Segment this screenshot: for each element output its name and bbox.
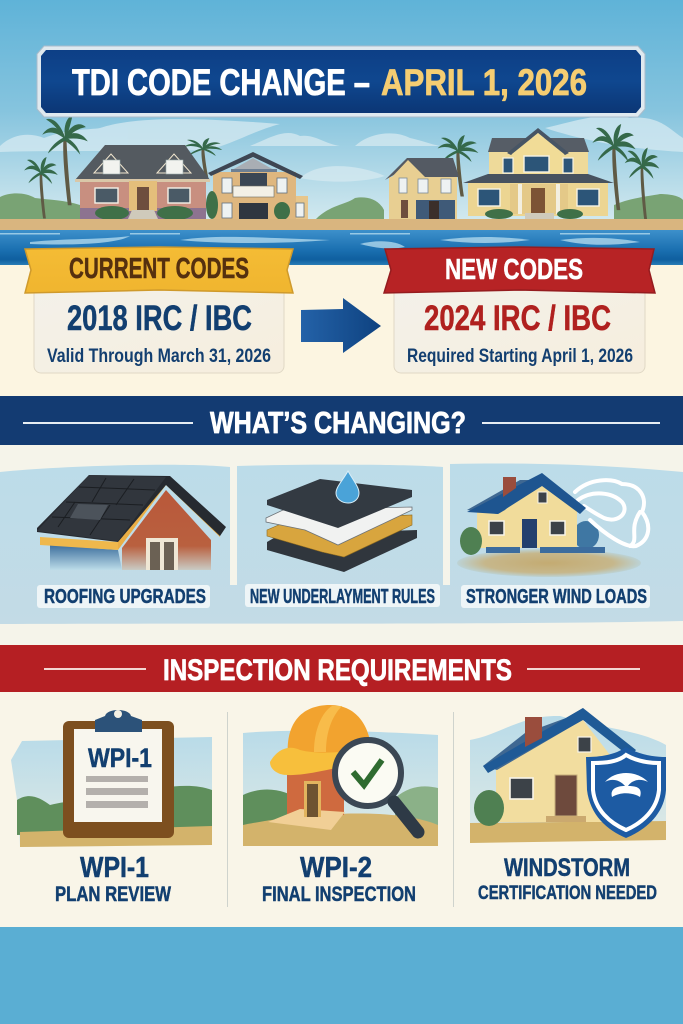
arrow (301, 298, 381, 353)
icon: house in wind (457, 473, 648, 577)
card: WPI-1 (11, 710, 212, 906)
icon: underlayment layers (266, 471, 417, 572)
panel: current codes (25, 247, 293, 373)
icon: water drop (336, 471, 359, 503)
house 1 (75, 145, 210, 220)
card: new codes: Required Starting April 1, 2026 (407, 346, 633, 367)
clouds (0, 116, 683, 182)
card: WPI-1: PLAN REVIEW (55, 883, 171, 906)
card: WPI-2 (243, 705, 438, 906)
ribbon: current codes: CURRENT CODES (69, 253, 249, 285)
palm trees (24, 115, 659, 219)
house 2 (206, 152, 308, 220)
what's changing section background (0, 445, 683, 645)
panel: inspection requirements (0, 692, 683, 927)
card: current codes (34, 285, 284, 373)
title text: APRIL 1, 2026 (381, 62, 587, 103)
card: WPI-1: WPI-1 (80, 852, 149, 884)
hills (0, 193, 683, 220)
sand (0, 219, 683, 230)
title text: TDI CODE CHANGE – (72, 62, 370, 103)
coastal scene (0, 0, 683, 267)
label: roofing upgrades: ROOFING UPGRADES (44, 586, 206, 608)
water (0, 230, 683, 267)
card: current codes: 2018 IRC / IBC (67, 299, 252, 338)
card: WPI-2: WPI-2 (300, 852, 372, 884)
card: windstorm: WINDSTORM (504, 854, 630, 882)
heading band: what's changing: WHAT’S CHANGING? (210, 405, 466, 440)
illustration: clipboard (11, 710, 212, 847)
ribbon: new codes (384, 247, 655, 293)
icon: roof (37, 475, 226, 570)
illustration: hard hat and magnifier (243, 705, 438, 846)
title banner (37, 46, 645, 117)
illustration: clipboard: WPI-1 (88, 743, 152, 773)
ribbon: current codes (25, 247, 293, 293)
panel: new codes (384, 247, 655, 373)
card: new codes (394, 285, 645, 373)
bottom band (0, 927, 683, 1024)
heading band: what's changing (0, 396, 683, 445)
heading band: inspection requirements (0, 645, 683, 692)
label: new underlayment rules (245, 584, 440, 608)
panel: what's changing (0, 463, 683, 624)
label: new underlayment rules: NEW UNDERLAYMENT RULES (250, 586, 435, 608)
card: WPI-2: FINAL INSPECTION (262, 883, 416, 906)
ribbon: new codes: NEW CODES (445, 254, 583, 286)
comparison section background (0, 265, 683, 396)
house 3 (385, 158, 459, 219)
card: new codes: 2024 IRC / IBC (424, 299, 611, 338)
heading band: inspection requirements: INSPECTION REQUIREMENTS (163, 654, 512, 687)
illustration: house with shield (470, 708, 666, 843)
card: windstorm (470, 708, 666, 904)
card: current codes: Valid Through March 31, 2026 (47, 346, 271, 367)
house 4 (463, 128, 614, 219)
